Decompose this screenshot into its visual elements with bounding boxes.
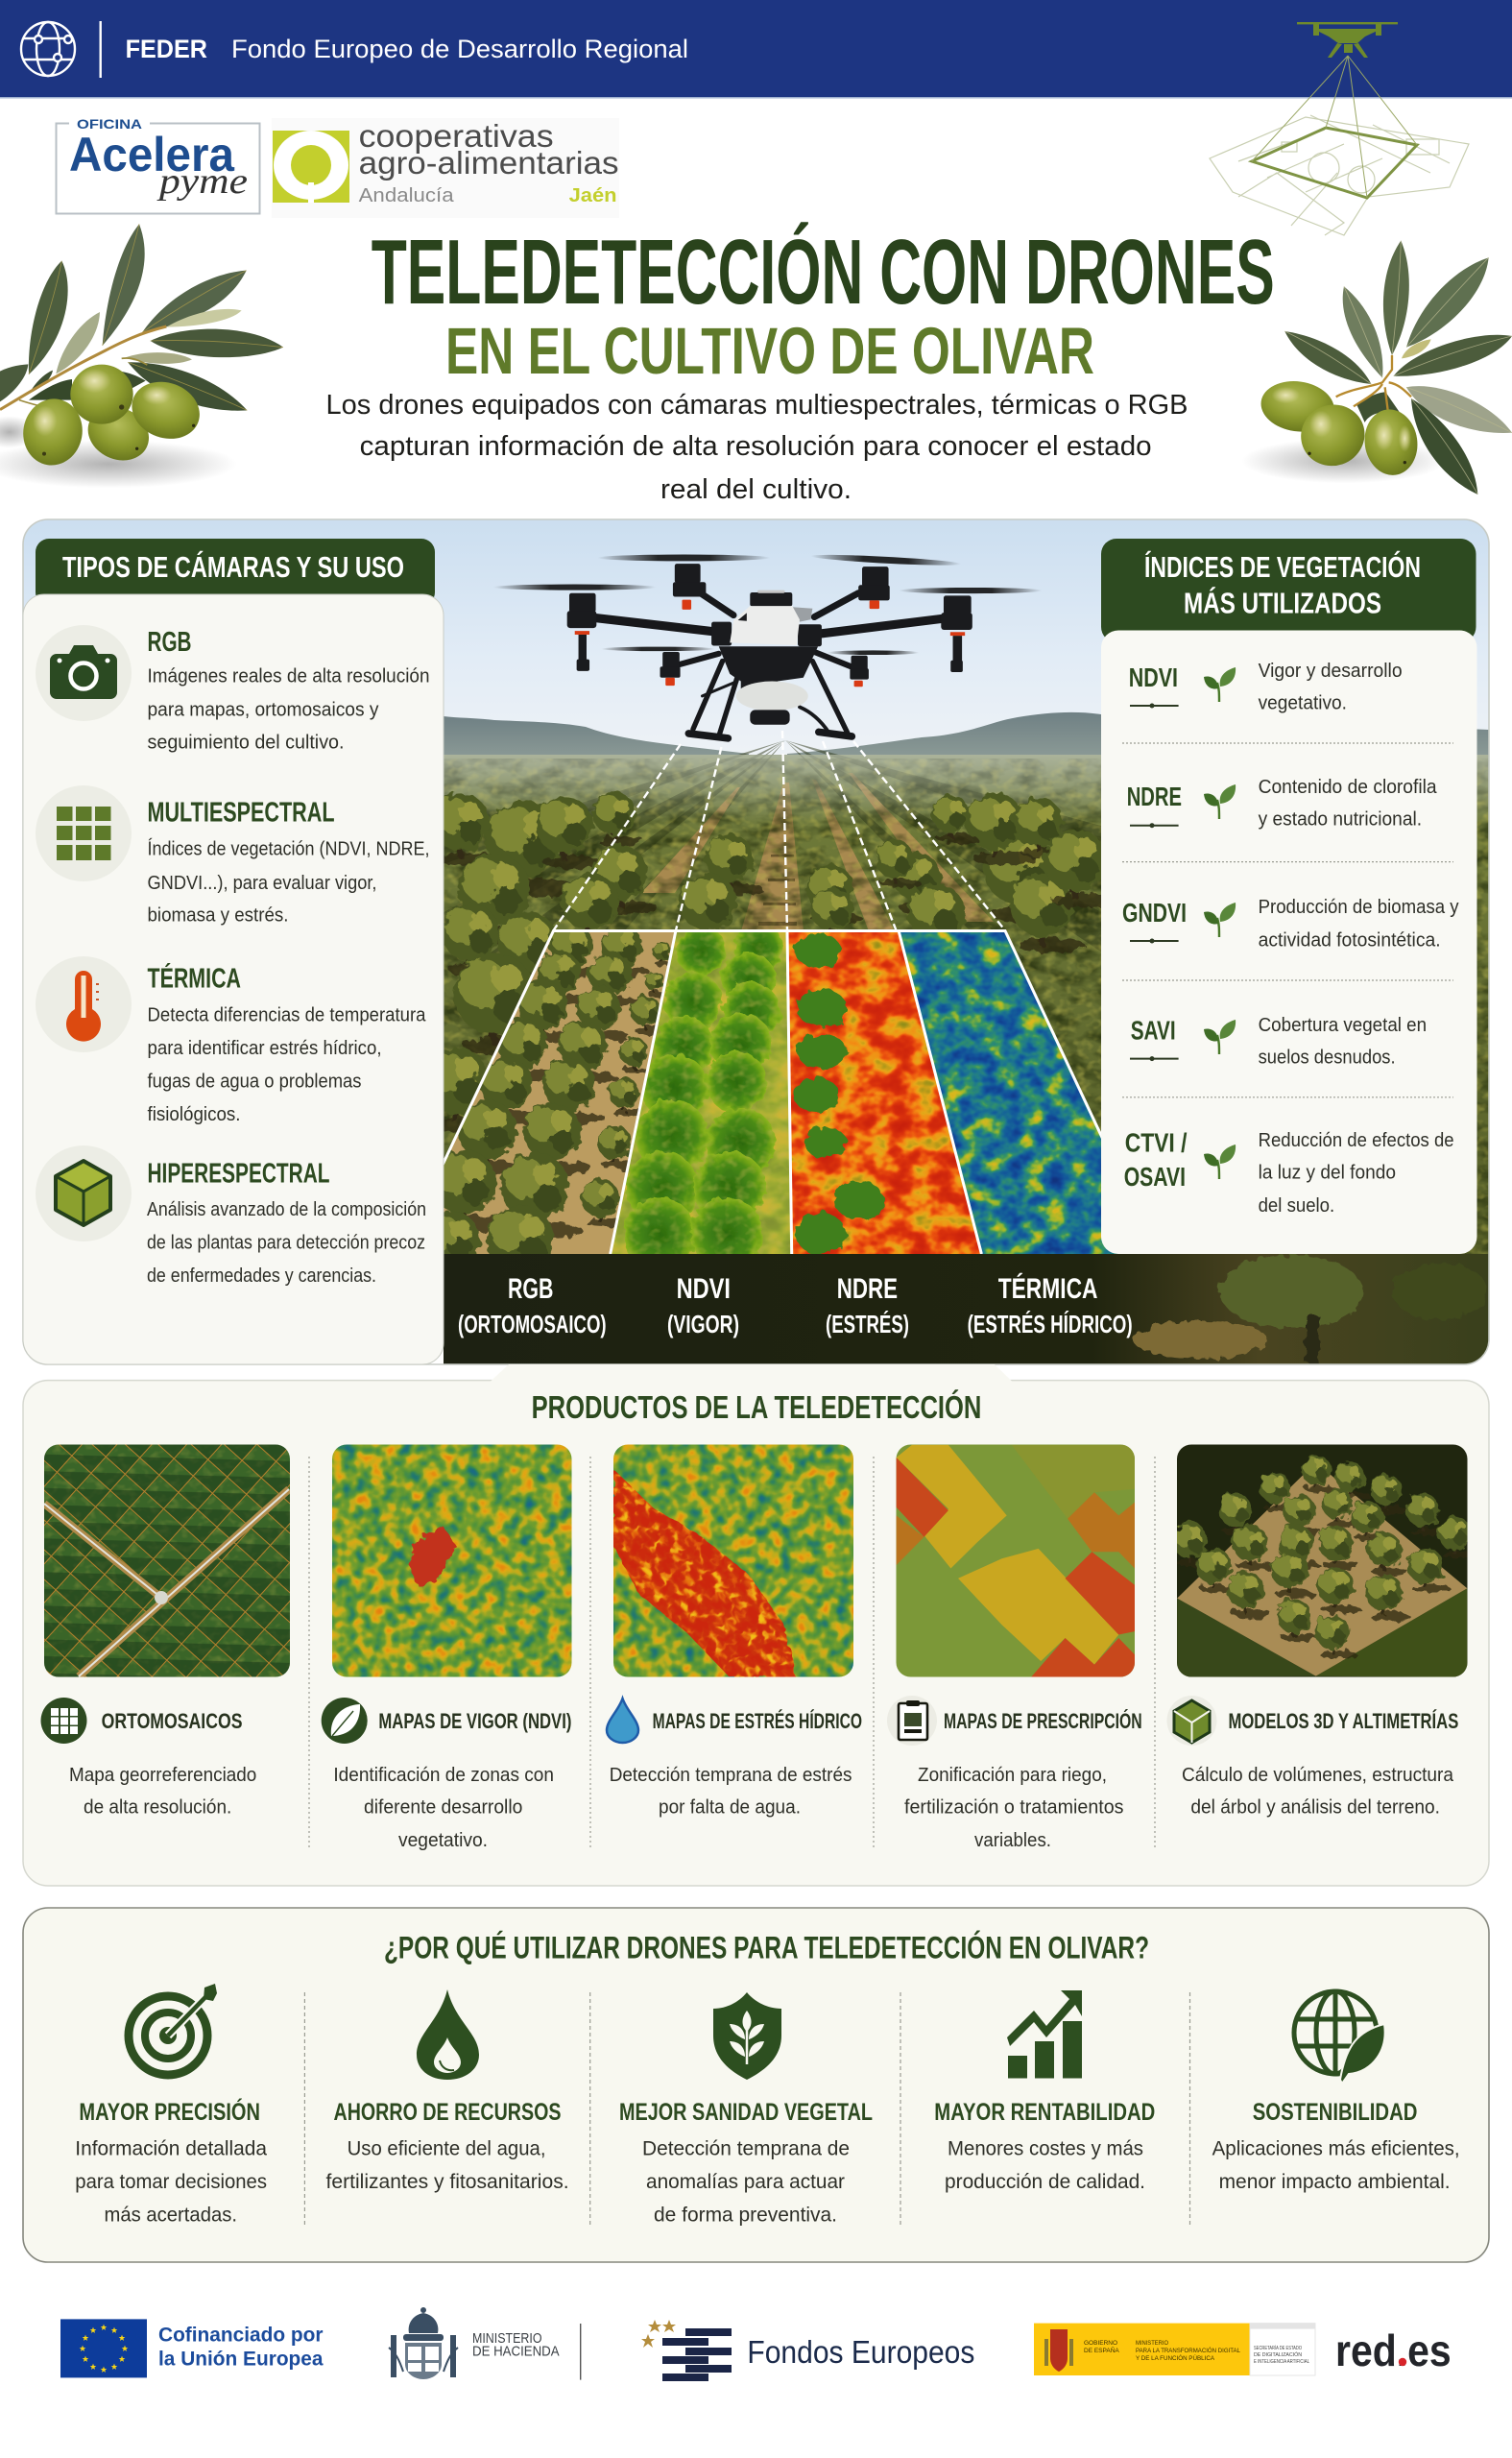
product: water stress maps label: MAPAS DE ESTRÉS HÍDRICO: [653, 1709, 862, 1733]
camera multispectral text: biomasa y estrés.: [148, 905, 288, 927]
intro text: real del cultivo.: [660, 474, 852, 505]
index: CTVI / OSAVI: Reducción de efectos de: [1259, 1130, 1454, 1151]
panel: camera types: [23, 539, 444, 1364]
benefit: precision: Información detallada: [75, 2138, 267, 2160]
index: SAVI: SAVI: [1131, 1016, 1176, 1045]
intro text: Los drones equipados con cámaras multiespectrales, térmicas o RGB: [326, 390, 1188, 421]
camera thermal text: fugas de agua o problemas: [148, 1071, 361, 1092]
hills: [444, 712, 1488, 755]
logo: Ministerio de Hacienda: [389, 2307, 581, 2380]
camera hyperspectral text: HIPERESPECTRAL: [148, 1159, 330, 1190]
olive orchard: [422, 740, 1489, 1254]
index: CTVI / OSAVI: OSAVI: [1124, 1162, 1186, 1192]
logo: Gobierno de España: Y DE LA FUNCIÓN PÚBLICA: [1136, 2353, 1215, 2362]
product: water stress maps label: por falta de agua.: [659, 1796, 801, 1819]
camera RGB text: Imágenes reales de alta resolución: [148, 666, 430, 687]
subtitle: EN EL CULTIVO DE OLIVAR: [445, 314, 1094, 388]
product: orthomosaics label: ORTOMOSAICOS: [102, 1709, 242, 1733]
product image: orthomosaic: [44, 1444, 290, 1677]
camera hyperspectral text: Análisis avanzado de la composición: [147, 1199, 426, 1220]
logo: Oficina Acelera Pyme: OFICINA: [77, 116, 142, 132]
logo: Gobierno de España: DE DIGITALIZACIÓN: [1254, 2351, 1302, 2358]
icon: hyperspectral cube: [36, 1145, 132, 1241]
logo: Ministerio de Hacienda: MINISTERIO: [472, 2330, 541, 2347]
camera multispectral text: Índices de vegetación (NDVI, NDRE,: [148, 838, 430, 860]
index: SAVI: suelos desnudos.: [1259, 1048, 1396, 1069]
camera hyperspectral text: [147, 1159, 426, 1287]
logo: Ministerio de Hacienda: DE HACIENDA: [472, 2343, 560, 2360]
benefit: precision: para tomar decisiones: [75, 2171, 267, 2193]
camera thermal text: para identificar estrés hídrico,: [148, 1038, 382, 1059]
heading: vegetation indices: MÁS UTILIZADOS: [1184, 587, 1381, 620]
product image: stress map: [613, 1444, 853, 1677]
panel: remote sensing products: [23, 1364, 1489, 1886]
camera multispectral text: MULTIESPECTRAL: [148, 798, 334, 829]
product: prescription maps label: MAPAS DE PRESCRIPCIÓN: [944, 1709, 1142, 1733]
camera multispectral text: GNDVI...), para evaluar vigor,: [148, 873, 376, 894]
index: NDRE: [1127, 777, 1437, 831]
product: water stress maps label: Detección temprana de estrés: [610, 1764, 852, 1786]
index: NDRE: y estado nutricional.: [1259, 809, 1422, 831]
product image: 3D model: [1171, 1444, 1478, 1677]
bottom label band: (ORTOMOSAICO): [458, 1310, 607, 1338]
intro text: [326, 390, 1188, 505]
logo: Oficina Acelera Pyme: [56, 116, 259, 213]
logo: Fondos Europeos: Fondos Europeos: [747, 2334, 974, 2370]
benefit: precision: [75, 1984, 267, 2226]
strip: thermal: [900, 932, 1117, 1254]
bottom label band: (ESTRÉS HÍDRICO): [968, 1310, 1133, 1338]
product: vigor maps label: vegetativo.: [398, 1829, 488, 1851]
index: GNDVI: Producción de biomasa y: [1259, 897, 1459, 918]
bottom label band: (VIGOR): [667, 1310, 739, 1338]
bottom label band: NDRE: [837, 1273, 898, 1305]
logo: Oficina Acelera Pyme: Acelera: [69, 128, 235, 181]
product: prescription maps label: [887, 1696, 1142, 1851]
icon: globe network: [21, 22, 75, 76]
product: orthomosaics label: Mapa georreferenciado: [69, 1764, 256, 1786]
icon: multispectral grid: [36, 785, 132, 881]
index: NDRE: NDRE: [1127, 782, 1182, 811]
heading: vegetation indices: [1144, 549, 1421, 620]
camera thermal text: [148, 962, 426, 1125]
bottom label band: (ESTRÉS): [826, 1310, 909, 1338]
camera hyperspectral text: de las plantas para detección precoz: [147, 1233, 425, 1254]
index: NDRE: Contenido de clorofila: [1259, 777, 1437, 798]
product: 3D models label: del árbol y análisis del terreno.: [1190, 1796, 1440, 1819]
bottom label band: RGB: [508, 1273, 553, 1305]
header title: Fondo Europeo de Desarrollo Regional: [231, 35, 688, 63]
benefit: sustainability: Aplicaciones más eficientes,: [1212, 2138, 1460, 2160]
benefit: profitability: [934, 1990, 1155, 2193]
index: CTVI / OSAVI: del suelo.: [1259, 1195, 1334, 1217]
product: water stress maps label: [607, 1699, 862, 1819]
index: NDVI: vegetativo.: [1259, 693, 1347, 714]
benefit: profitability: Menores costes y más: [948, 2138, 1143, 2160]
product: orthomosaics label: de alta resolución.: [84, 1796, 231, 1819]
benefit: sustainability: SOSTENIBILIDAD: [1253, 2099, 1417, 2126]
index: SAVI: Cobertura vegetal en: [1259, 1015, 1427, 1036]
logo: Oficina Acelera Pyme: pyme: [156, 161, 248, 202]
title: [372, 221, 1275, 388]
camera RGB text: [148, 627, 430, 753]
logo: Cooperativas Agro-alimentarias: [272, 118, 619, 218]
product image: prescription map: [895, 1444, 1136, 1677]
benefit: plant health: anomalías para actuar: [646, 2171, 845, 2193]
camera RGB text: RGB: [148, 627, 192, 658]
logo: Gobierno de España: E INTELIGENCIA ARTIFICIAL: [1254, 2359, 1309, 2365]
index: GNDVI: GNDVI: [1122, 898, 1187, 928]
camera hyperspectral text: de enfermedades y carencias.: [147, 1265, 376, 1287]
heading: camera types: TIPOS DE CÁMARAS Y SU USO: [62, 550, 404, 584]
illustration: agricultural drone: [493, 553, 1043, 738]
logo: red.es: red.es: [1335, 2325, 1452, 2375]
benefit: profitability: MAYOR RENTABILIDAD: [934, 2099, 1155, 2126]
panel: hero illustration: [23, 519, 1489, 1364]
bottom label band: [444, 1254, 1489, 1364]
logo: Fondos Europeos: [641, 2320, 974, 2381]
camera thermal text: TÉRMICA: [148, 962, 241, 995]
index: NDVI: [1129, 661, 1403, 714]
index: NDVI: Vigor y desarrollo: [1259, 661, 1403, 682]
heading: vegetation indices: ÍNDICES DE VEGETACIÓN: [1144, 549, 1421, 584]
logo: Gobierno de España: SECRETARÍA DE ESTADO: [1254, 2345, 1302, 2351]
benefit: plant health: [619, 1992, 873, 2226]
benefit: plant health: de forma preventiva.: [654, 2205, 837, 2226]
intro text: capturan información de alta resolución para conocer el estado: [360, 431, 1152, 462]
benefit: resource saving: Uso eficiente del agua,: [348, 2138, 545, 2160]
index: NDVI: NDVI: [1129, 663, 1178, 692]
product: prescription maps label: Zonificación para riego,: [918, 1764, 1107, 1786]
logo: Gobierno de España: MINISTERIO: [1136, 2340, 1168, 2347]
benefit: precision: más acertadas.: [104, 2205, 237, 2226]
strip outlines: [444, 929, 1101, 1254]
benefit: precision: MAYOR PRECISIÓN: [79, 2097, 260, 2126]
index: CTVI / OSAVI: CTVI /: [1125, 1128, 1188, 1158]
panel: vegetation indices: [1101, 539, 1476, 1254]
logo: cofinanced by the EU: [60, 2319, 324, 2377]
strip: RGB orthomosaic: [444, 932, 674, 1254]
illustration: left olive branch: [0, 224, 283, 488]
product: orthomosaics label: [40, 1698, 256, 1819]
bottom label band: TÉRMICA: [998, 1272, 1098, 1305]
camera footprint dashed lines: [553, 731, 1005, 930]
heading: why drones: ¿POR QUÉ UTILIZAR DRONES PARA TELEDETECCIÓN EN OLIVAR?: [384, 1931, 1149, 1965]
product: prescription maps label: variables.: [974, 1829, 1051, 1851]
camera RGB text: para mapas, ortomosaicos y: [148, 699, 378, 720]
product: vigor maps label: diferente desarrollo: [364, 1796, 522, 1819]
product: vigor maps label: [322, 1698, 571, 1851]
index: CTVI / OSAVI: [1124, 1128, 1454, 1217]
logo: Cooperativas Agro-alimentarias: Andalucía: [359, 185, 455, 206]
logo: cofinanced by the EU: Cofinanciado por: [158, 2324, 323, 2346]
camera RGB text: seguimiento del cultivo.: [148, 732, 344, 753]
product: prescription maps label: fertilización o tratamientos: [904, 1796, 1123, 1819]
icon: camera: [36, 625, 132, 721]
header title: FEDER: [126, 35, 207, 63]
benefit: resource saving: fertilizantes y fitosanitarios.: [326, 2171, 569, 2193]
benefit: resource saving: AHORRO DE RECURSOS: [334, 2099, 561, 2126]
strip: NDVI: [612, 932, 791, 1254]
benefit: plant health: MEJOR SANIDAD VEGETAL: [619, 2099, 873, 2126]
product: vigor maps label: Identificación de zonas con: [333, 1764, 554, 1786]
logo: Cooperativas Agro-alimentarias: agro-alimentarias: [359, 145, 619, 181]
logo: Gobierno de España: DE ESPAÑA: [1084, 2346, 1119, 2354]
index: CTVI / OSAVI: la luz y del fondo: [1259, 1163, 1396, 1184]
benefit: sustainability: [1212, 1991, 1460, 2193]
strip: NDRE: [787, 927, 989, 1258]
product: 3D models label: Cálculo de volúmenes, estructura: [1182, 1764, 1454, 1786]
product: vigor maps label: MAPAS DE VIGOR (NDVI): [378, 1709, 571, 1733]
benefit: profitability: producción de calidad.: [945, 2171, 1145, 2193]
index: SAVI: [1130, 1015, 1427, 1069]
benefit: sustainability: menor impacto ambiental.: [1219, 2171, 1451, 2193]
header band: [0, 0, 1512, 98]
index: GNDVI: actividad fotosintética.: [1259, 929, 1441, 951]
camera thermal text: fisiológicos.: [148, 1104, 240, 1125]
heading: products: PRODUCTOS DE LA TELEDETECCIÓN: [532, 1389, 981, 1425]
product: 3D models label: [1167, 1696, 1458, 1819]
logo: cofinanced by the EU: la Unión Europea: [158, 2349, 324, 2371]
illustration: survey drone over plot map: [1210, 22, 1469, 235]
benefit: plant health: Detección temprana de: [642, 2138, 850, 2160]
logo: Gobierno de España: [1034, 2324, 1315, 2375]
camera multispectral text: [148, 798, 430, 927]
logo: Cooperativas Agro-alimentarias: Jaén: [569, 185, 617, 206]
logo: Cooperativas Agro-alimentarias: cooperativas: [359, 118, 554, 154]
panel: why use drones: [23, 1908, 1489, 2262]
product image: vigor map: [332, 1444, 572, 1677]
camera thermal text: Detecta diferencias de temperatura: [148, 1004, 426, 1025]
benefit: resource saving: [326, 1989, 569, 2193]
illustration: right olive branch: [1241, 241, 1512, 494]
logo: Gobierno de España: PARA LA TRANSFORMACIÓN DIGITAL: [1136, 2346, 1240, 2354]
index: GNDVI: [1122, 897, 1459, 951]
icon: thermometer: [36, 956, 132, 1052]
logo: Gobierno de España: GOBIERNO: [1084, 2340, 1117, 2347]
bottom label band: NDVI: [677, 1273, 731, 1305]
